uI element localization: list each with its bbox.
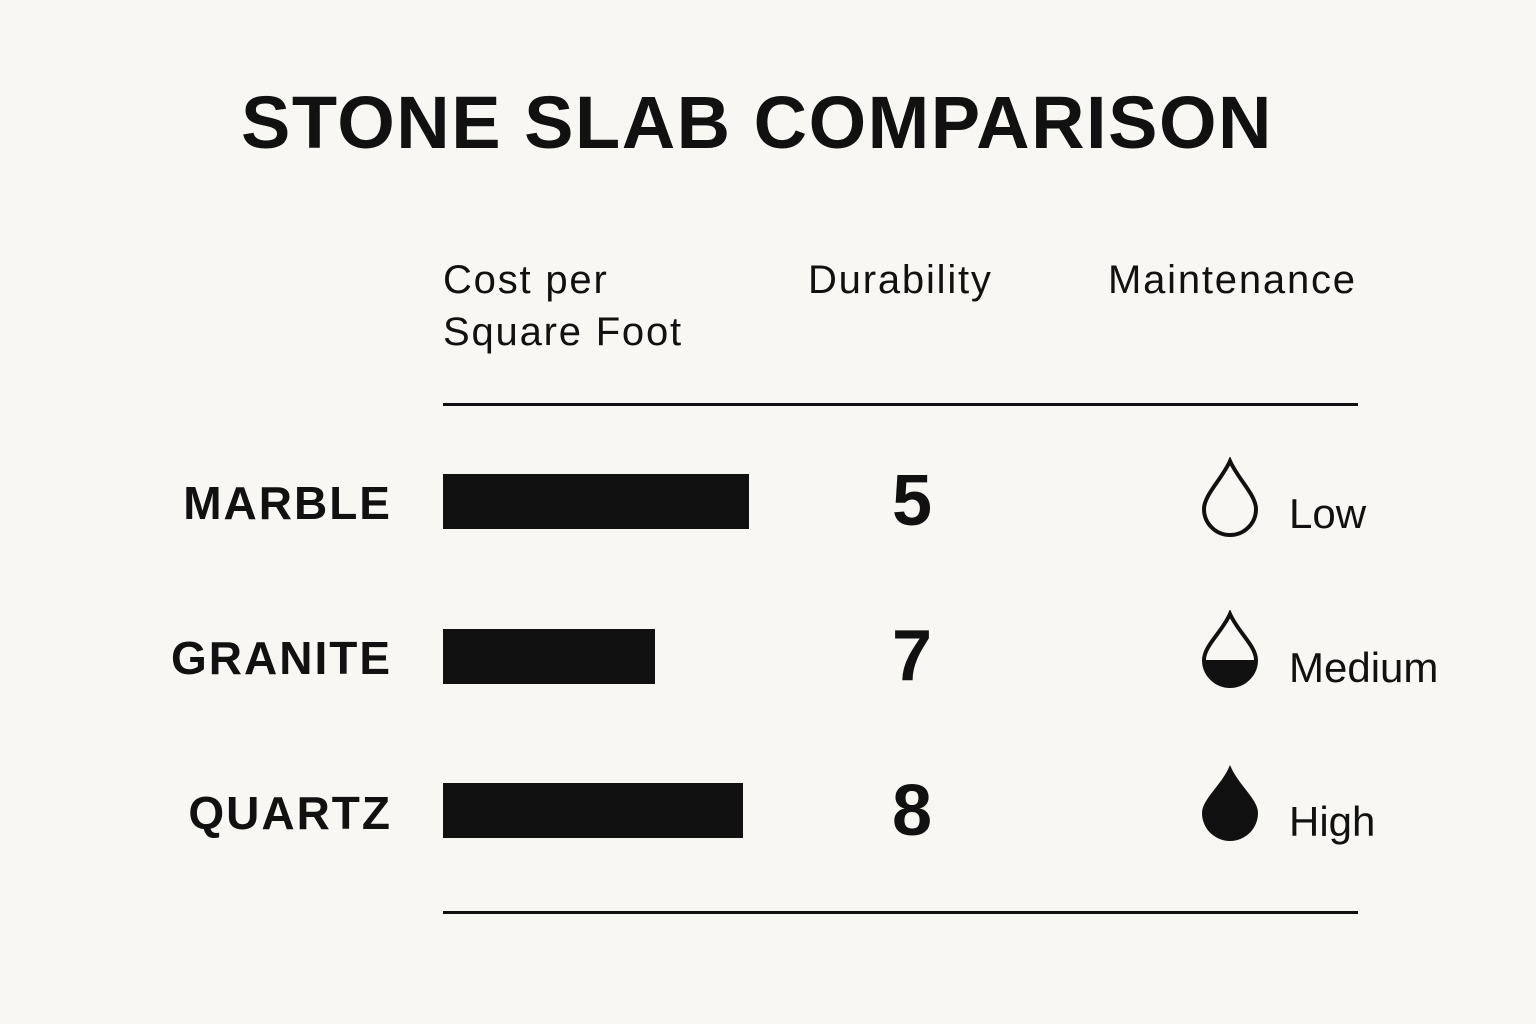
header: durability: Durability — [808, 258, 993, 302]
row label: granite: GRANITE — [171, 632, 392, 684]
header: cost: Cost per — [443, 258, 609, 302]
icon: drop full — [1202, 765, 1258, 841]
bar: granite — [443, 629, 655, 684]
bar: quartz — [443, 783, 743, 838]
header: cost: Square Foot — [443, 310, 683, 354]
durability: 7: 7 — [892, 616, 932, 696]
row label: marble: MARBLE — [183, 477, 392, 529]
title: STONE SLAB COMPARISON — [241, 81, 1273, 164]
durability: 5: 5 — [892, 461, 932, 541]
header: cost — [443, 258, 683, 354]
icon: drop half — [1202, 610, 1258, 688]
bar: marble — [443, 474, 749, 529]
durability: 8: 8 — [892, 771, 932, 851]
icon: drop empty — [1202, 457, 1258, 537]
maintenance: low: Low — [1289, 490, 1366, 537]
maintenance: medium: Medium — [1289, 644, 1438, 691]
header: maintenance: Maintenance — [1108, 258, 1357, 302]
maintenance: high: High — [1289, 798, 1375, 845]
row label: quartz: QUARTZ — [188, 787, 392, 839]
